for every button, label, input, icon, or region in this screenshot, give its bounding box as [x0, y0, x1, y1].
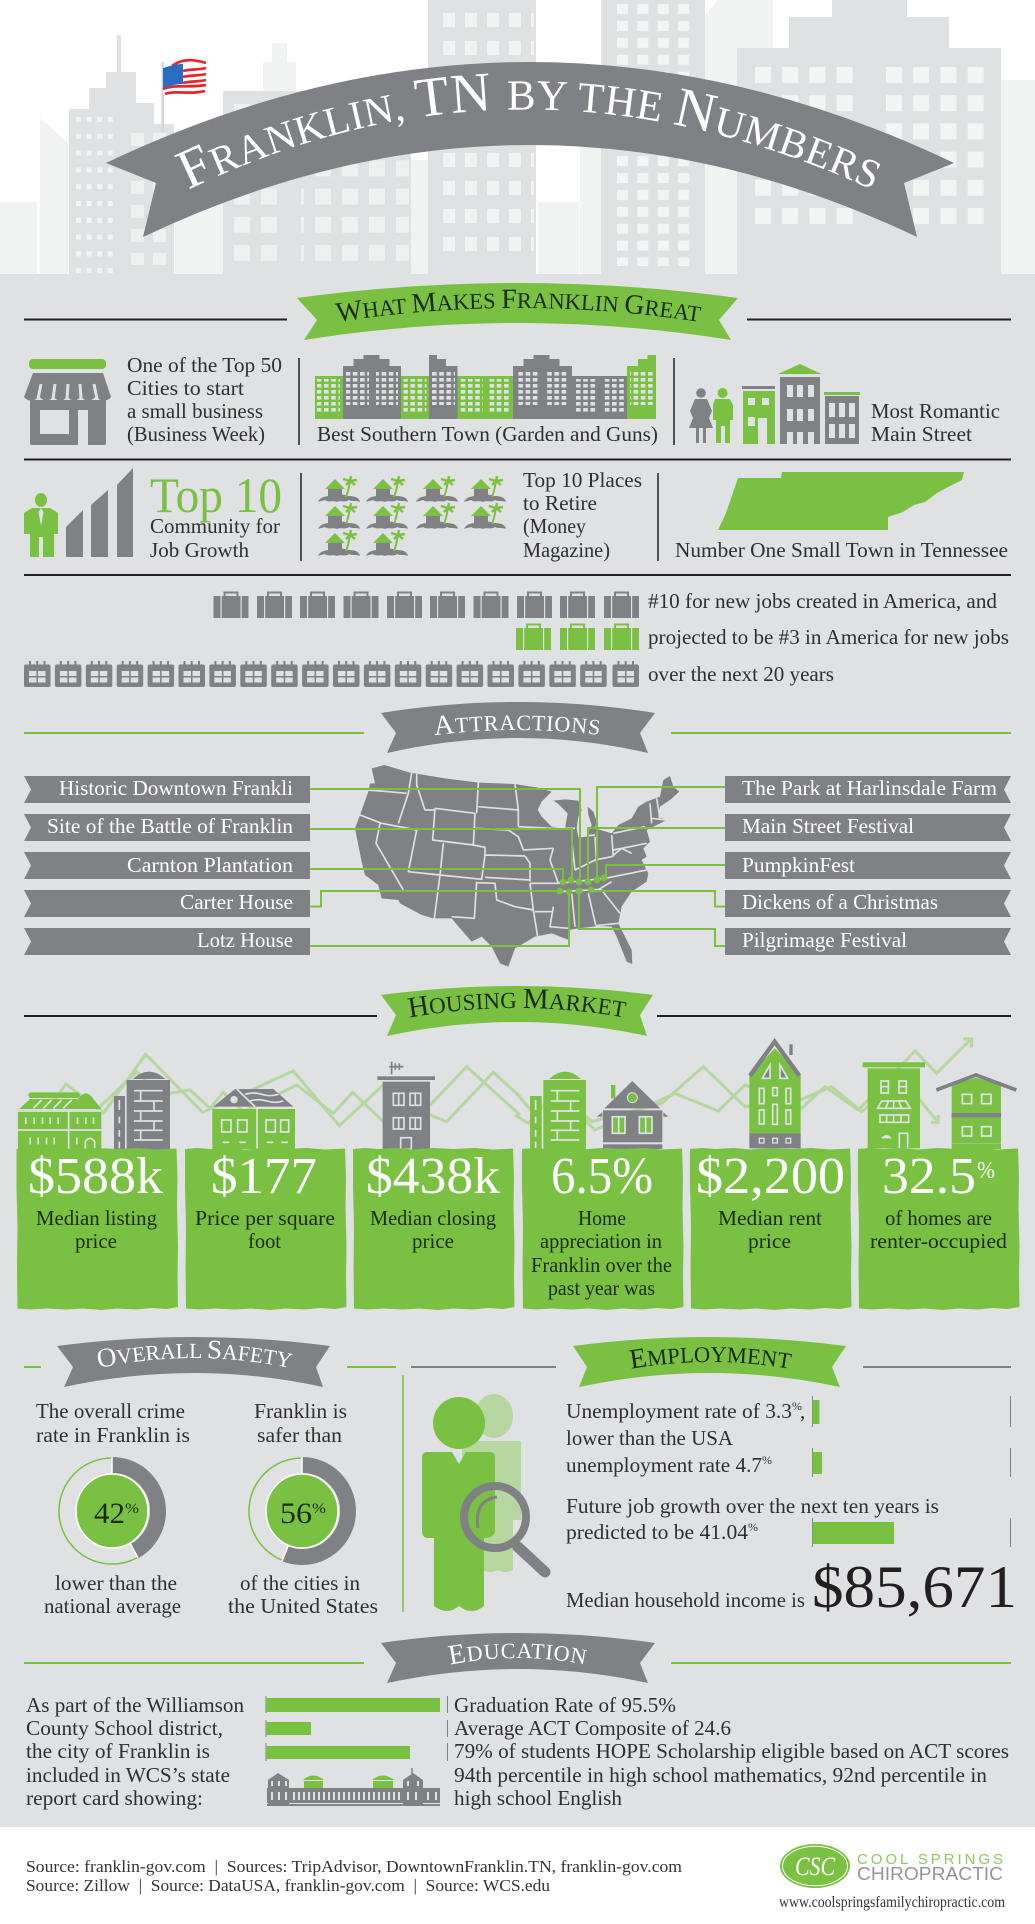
card: median rent: price [748, 1229, 791, 1253]
card: median rent: $2,200 [696, 1148, 845, 1205]
text: top 10 places to retire [523, 468, 642, 562]
card: price per square foot: foot [248, 1229, 281, 1253]
text: new jobs [648, 589, 1009, 686]
label: carnton plantation: Carnton Plantation [127, 853, 294, 877]
icon: american flag [162, 60, 206, 132]
icon: job growth person and bars [24, 468, 133, 557]
text: of the cities in united states: of the cities in [240, 1571, 360, 1595]
donut chart: 56 percent: 56 [280, 1497, 312, 1530]
logo: cool springs chiropractic: CSC [795, 1852, 836, 1881]
skyline background [0, 0, 1035, 274]
donut chart: 56 percent: % [312, 1501, 326, 1517]
card: home appreciation: past year was [548, 1276, 655, 1300]
houses: listing price [18, 1072, 170, 1150]
text: lower than national average [44, 1571, 181, 1618]
text: top 50 cities [127, 353, 282, 446]
footer sources [26, 1857, 682, 1895]
chart: zigzag price trend lines [53, 1038, 972, 1130]
text: most romantic main street: Most Romantic [871, 399, 1000, 423]
label: pilgrimage festival [725, 928, 1011, 955]
houses: home appreciation [530, 1072, 668, 1150]
text: new jobs: #10 for new jobs created in America, and [648, 589, 997, 613]
house: price per square foot [212, 1089, 295, 1149]
section heading: Overall Safety: OVERALL SAFETY [98, 1340, 292, 1368]
text: best southern town: Best Southern Town (Garden and Guns) [317, 422, 658, 446]
section heading: Overall Safety [24, 1337, 396, 1387]
card: home appreciation: appreciation in [540, 1229, 662, 1253]
text: education stats: Graduation Rate of 95.5% [454, 1693, 676, 1717]
text: top 50 cities: One of the Top 50 [127, 353, 282, 377]
label: dickens of a christmas [725, 890, 1011, 917]
text: of the cities in united states: the United States [228, 1594, 378, 1618]
icon: palm tree islands [318, 476, 506, 556]
text: overall crime rate: rate in Franklin is [36, 1423, 190, 1447]
logo: cool springs chiropractic: COOL SPRINGS [857, 1851, 1003, 1868]
text: education stats [454, 1693, 1009, 1810]
text: williamson county intro: included in WCS’s state [26, 1763, 230, 1787]
us map [355, 765, 679, 967]
text: most romantic main street [871, 399, 1000, 446]
text: unemployment rate: Unemployment rate of 3.3 [566, 1399, 792, 1423]
card: home appreciation [522, 1148, 684, 1310]
text: franklin is safer than [254, 1399, 347, 1447]
bar chart: education [266, 1696, 448, 1761]
text: unemployment rate: , [800, 1399, 805, 1423]
text: future job growth: % [748, 1520, 758, 1534]
label: pilgrimage festival: Pilgrimage Festival [742, 928, 907, 952]
text: unemployment rate: % [762, 1453, 772, 1467]
section heading: Education [24, 1633, 1011, 1683]
section heading: Housing Market: HOUSING MARKET [407, 988, 627, 1018]
text: williamson county intro [26, 1693, 244, 1810]
text: education stats: high school English [454, 1786, 622, 1810]
text: franklin is safer than: Franklin is [254, 1399, 347, 1423]
label: carter house [24, 890, 310, 917]
icon: school building [267, 1768, 440, 1806]
icon row: new jobs briefcases [214, 592, 639, 618]
card: median closing price [353, 1148, 514, 1310]
text: overall crime rate: The overall crime [36, 1399, 185, 1423]
label: carter house: Carter House [180, 890, 293, 914]
section heading: Attractions: ATTRACTIONS [434, 716, 599, 736]
text: williamson county intro: County School district, [26, 1716, 223, 1740]
text: overall crime rate [36, 1399, 190, 1447]
card: price per square foot [185, 1148, 346, 1310]
label: lotz house [24, 928, 310, 955]
section heading: Attractions [24, 702, 1011, 753]
icon: people with magnifying glass [422, 1394, 545, 1611]
label: main street festival [725, 814, 1011, 841]
building and house: renter occupied [863, 1062, 1016, 1149]
icon: storefront [24, 359, 111, 445]
stat: top 10 community for job growth: Job Growth [150, 538, 249, 562]
footer sources: Source: franklin-gov.com | Sources: TripAdvisor, DowntownFranklin.TN, franklin-gov.com [26, 1857, 682, 1876]
card: renter occupied: % [977, 1158, 995, 1184]
text: unemployment rate: unemployment rate 4.7 [566, 1453, 762, 1477]
card: price per square foot: Price per square [195, 1206, 335, 1230]
bar chart: unemployment [812, 1396, 1010, 1477]
section heading: What Makes Franklin Great [24, 283, 1011, 340]
stat: median household income: Median household income is [566, 1588, 805, 1612]
text: lower than national average: national average [44, 1594, 181, 1618]
card: home appreciation: Franklin over the [531, 1253, 672, 1277]
card: median listing price [16, 1148, 178, 1310]
card: renter occupied: 32.5 [882, 1148, 976, 1205]
section heading: Housing Market [24, 986, 1011, 1036]
card: renter occupied: of homes are [885, 1206, 992, 1230]
text: unemployment rate: lower than the USA [566, 1426, 734, 1450]
label: pumpkinfest: PumpkinFest [742, 853, 855, 877]
text: franklin is safer than: safer than [257, 1423, 343, 1447]
donut chart: 42 percent [59, 1457, 165, 1564]
card: median listing price: Median listing [36, 1206, 157, 1230]
stat: top 10 community for job growth: Top 10 [150, 467, 282, 523]
label: park at harlinsdale: The Park at Harlinsdale Farm [742, 776, 997, 800]
footer sources: Source: Zillow | Source: DataUSA, franklin-gov.com | Source: WCS.edu [26, 1876, 551, 1895]
donut chart: 56 percent [249, 1457, 355, 1564]
text: top 50 cities: Cities to start [127, 376, 244, 400]
text: number one small town: Number One Small Town in Tennessee [675, 538, 1008, 562]
logo: cool springs chiropractic [779, 1844, 1005, 1911]
label: dickens of a christmas: Dickens of a Christmas [742, 890, 938, 914]
text: top 10 places to retire: Magazine) [523, 538, 610, 562]
text: top 10 places to retire: Top 10 Places [523, 468, 642, 492]
text: future job growth [566, 1494, 939, 1544]
section heading: Employment [411, 1337, 1011, 1387]
house: median rent [749, 1042, 801, 1148]
map connector lines and pins [310, 787, 725, 946]
card: median listing price: price [75, 1229, 117, 1253]
text: future job growth: predicted to be 41.04 [566, 1520, 749, 1544]
card: median closing price: $438k [366, 1148, 500, 1205]
text: education stats: 94th percentile in high school mathematics, 92nd percentile in [454, 1763, 988, 1787]
label: carnton plantation [24, 852, 310, 879]
text: most romantic main street: Main Street [871, 422, 972, 446]
donut chart: 42 percent: % [125, 1501, 139, 1517]
card: median closing price: price [412, 1229, 454, 1253]
text: unemployment rate [566, 1399, 805, 1477]
card: renter occupied [858, 1148, 1020, 1310]
text: lower than national average: lower than the [55, 1571, 177, 1595]
text: future job growth: Future job growth over the next ten years is [566, 1494, 939, 1518]
attraction labels right [725, 776, 1011, 955]
donut chart: 42 percent: 42 [94, 1497, 125, 1530]
text: unemployment rate: % [792, 1399, 802, 1413]
card: home appreciation: 6.5% [551, 1148, 653, 1205]
title banner [106, 62, 954, 237]
label: lotz house: Lotz House [197, 928, 293, 952]
label: site of the battle: Site of the Battle of Franklin [47, 814, 294, 838]
label: main street festival: Main Street Festival [742, 814, 914, 838]
logo: cool springs chiropractic: www.coolspringsfamilychiropractic.com [779, 1894, 1005, 1911]
card: median closing price: Median closing [370, 1206, 496, 1230]
stat: top 10 community for job growth: Community for [150, 514, 280, 538]
text: top 50 cities: (Business Week) [127, 422, 265, 446]
label: pumpkinfest [725, 852, 1011, 879]
card: renter occupied: renter-occupied [870, 1229, 1008, 1253]
text: top 10 places to retire: to Retire [523, 491, 597, 515]
text: new jobs: projected to be #3 in America for new jobs [648, 625, 1009, 649]
section heading: Employment: EMPLOYMENT [629, 1347, 792, 1369]
text: education stats: 79% of students HOPE Scholarship eligible based on ACT scores [454, 1739, 1009, 1763]
icon: tennessee state [718, 472, 964, 530]
logo: cool springs chiropractic: CHIROPRACTIC [857, 1864, 1003, 1884]
text: top 10 places to retire: (Money [523, 514, 586, 538]
card: price per square foot: $177 [211, 1148, 317, 1205]
section heading: What Makes Franklin Great: WHAT MAKES FRANKLIN GREAT [334, 290, 702, 322]
icon: couple and main street buildings [689, 364, 860, 444]
stat: median household income [566, 1554, 1017, 1620]
text: top 50 cities: a small business [127, 399, 263, 423]
attraction labels left [24, 776, 310, 955]
icon: southern town buildings [315, 355, 656, 419]
label: historic downtown: Historic Downtown Frankli [59, 776, 293, 800]
building: median closing price [377, 1062, 435, 1150]
card: median listing price: $588k [28, 1148, 163, 1205]
card: median rent: Median rent [718, 1206, 822, 1230]
text: williamson county intro: As part of the Williamson [26, 1693, 244, 1717]
text: education stats: Average ACT Composite of 24.6 [454, 1716, 731, 1740]
title: FRANKLIN, TN BY THE NUMBERS [174, 74, 880, 189]
bar chart: job growth [812, 1518, 1010, 1547]
icon row: projected jobs briefcases [516, 624, 639, 650]
card: home appreciation: Home [578, 1206, 626, 1230]
card: median rent [690, 1148, 852, 1310]
text: new jobs: over the next 20 years [648, 662, 834, 686]
text: williamson county intro: the city of Franklin is [26, 1739, 210, 1763]
stat: top 10 community for job growth [150, 467, 282, 562]
section heading: Education: EDUCATION [448, 1644, 588, 1664]
icon row: 20 calendars [24, 661, 639, 687]
text: williamson county intro: report card showing: [26, 1786, 203, 1810]
stat: median household income: $85,671 [812, 1554, 1017, 1620]
text: of the cities in united states [228, 1571, 378, 1618]
